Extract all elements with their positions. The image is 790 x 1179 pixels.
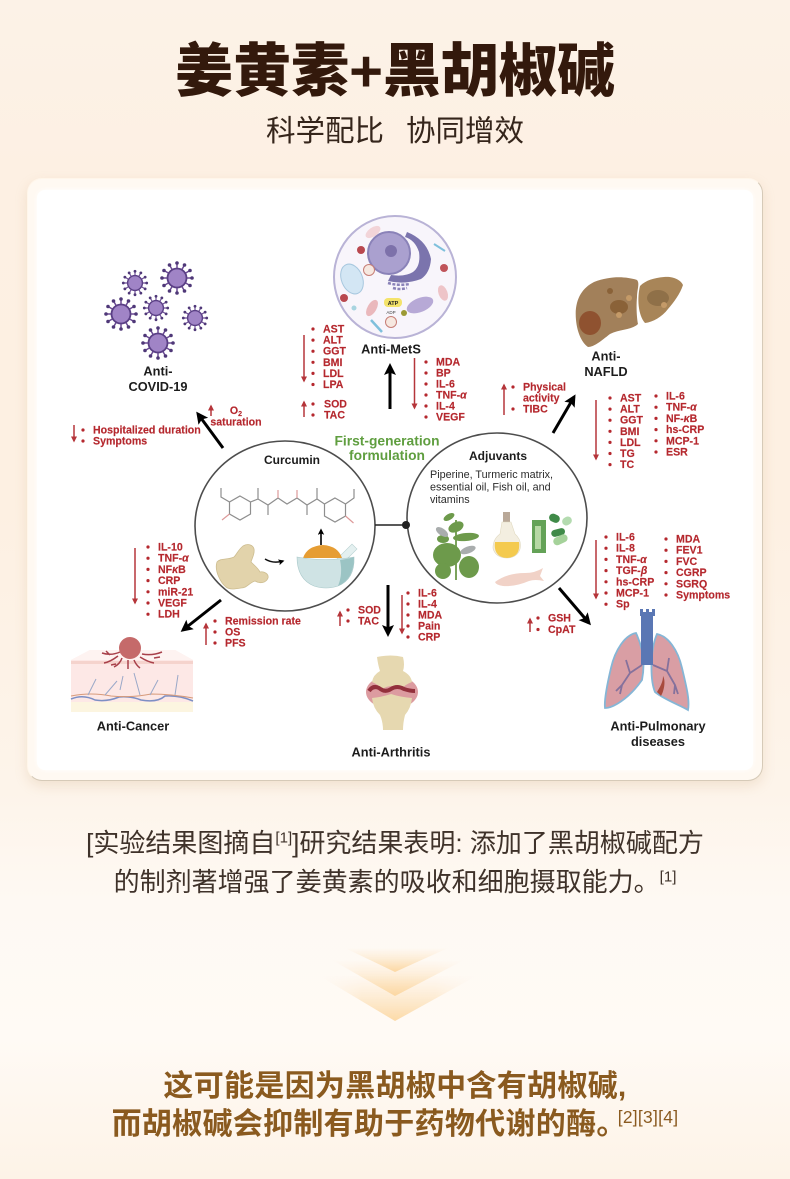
- list: MetS up: [304, 398, 347, 422]
- list: Pulmonary down left: [596, 532, 654, 611]
- label: Anti-Cancer: Anti-Cancer: [97, 718, 169, 734]
- list: MetS down left: [304, 324, 346, 391]
- arrow: to Pulmonary: [559, 588, 589, 623]
- list: Arthritis up: SOD: [358, 604, 381, 616]
- icon: cell: [334, 216, 456, 338]
- list: Pulmonary down left: TNF-α: [616, 554, 647, 566]
- heading: First-generation formulation: First-generation: [334, 434, 440, 448]
- icon: chevrons: [339, 951, 456, 1021]
- list: NAFLD down left: AST: [620, 392, 641, 404]
- icon: cell: ADP: [386, 310, 396, 315]
- list: Pulmonary down left: IL-6: [616, 532, 635, 544]
- label: Anti-NAFLD: Anti-: [591, 348, 621, 364]
- diagram: [70, 215, 730, 1021]
- list: Pulmonary down left: Sp: [616, 599, 630, 611]
- list: MetS down left: AST: [323, 324, 344, 336]
- list: NAFLD down right: IL-6: [666, 390, 685, 402]
- icon: virus cluster: [104, 261, 208, 360]
- list: Pulmonary down right: FEV1: [676, 545, 703, 557]
- list: NAFLD down right: [656, 390, 704, 458]
- list: Arthritis up: TAC: [358, 616, 379, 628]
- icon: green capsules: [532, 512, 573, 553]
- text: adjuvant description: essential oil, Fish oil, and: [430, 482, 551, 494]
- panel: Curcumin circle: [195, 441, 375, 611]
- arrow: to COVID: [198, 414, 223, 448]
- list: NAFLD down right: hs-CRP: [666, 424, 704, 436]
- list: MetS down right: IL-4: [436, 400, 455, 412]
- list: Pulmonary up: GSH: [548, 612, 571, 624]
- list: NAFLD up: activity: [523, 392, 560, 404]
- label: Anti-Pulmonary diseases: Anti-Pulmonary: [610, 718, 706, 734]
- list: MetS down right: VEGF: [436, 412, 465, 424]
- list: Pulmonary down right: MDA: [676, 534, 700, 546]
- list: Cancer down: IL-10: [158, 542, 183, 554]
- list: Pulmonary down left: IL-8: [616, 543, 635, 555]
- list: Cancer down: VEGF: [158, 598, 187, 610]
- list: NAFLD down left: GGT: [620, 415, 643, 427]
- list: Pulmonary down left: hs-CRP: [616, 576, 654, 588]
- label: Anti-COVID-19: COVID-19: [128, 379, 188, 394]
- list: Cancer down: [135, 542, 193, 621]
- list: COVID oxygen: 2: [238, 411, 242, 418]
- arrow: to NAFLD: [553, 397, 574, 433]
- molecule: [221, 488, 354, 523]
- list: NAFLD down left: TC: [620, 459, 634, 471]
- caption: [实验结果图摘自[1]]研究结果表明: 添加了黑胡椒碱配方: [86, 828, 704, 858]
- list: MetS down right: IL-6: [436, 378, 455, 390]
- label: Anti-MetS: Anti-MetS: [361, 342, 421, 356]
- list: MetS down left: LPA: [323, 379, 344, 391]
- list: NAFLD up: TIBC: [523, 404, 548, 416]
- list: Cancer down: TNF-α: [158, 553, 189, 565]
- heading: Adjuvants: Adjuvants: [469, 449, 527, 463]
- list: NAFLD down left: [596, 392, 643, 471]
- list: Pulmonary down left: MCP-1: [616, 588, 649, 600]
- list: COVID oxygen: [210, 405, 262, 428]
- list: NAFLD down left: ALT: [620, 404, 640, 416]
- conclusion: 而胡椒碱会抑制有助于药物代谢的酶。[2][3][4]: [112, 1107, 678, 1141]
- list: MetS down right: MDA: [436, 356, 460, 368]
- list: Pulmonary down right: CGRP: [676, 567, 707, 579]
- conclusion: [112, 1070, 678, 1141]
- list: MetS down left: GGT: [323, 346, 346, 358]
- list: COVID down: [74, 424, 201, 448]
- heading: Curcumin: Curcumin: [264, 453, 320, 467]
- icon: pepper plant: [433, 511, 479, 580]
- list: Cancer up: Remission rate: [225, 616, 301, 628]
- title: 姜黄素+黑胡椒碱: [175, 39, 615, 104]
- icon: oil bottle: [493, 512, 520, 558]
- arrow: up: [320, 530, 322, 545]
- list: Arthritis down: Pain: [418, 620, 440, 632]
- icon: ginger: [216, 545, 268, 589]
- list: COVID oxygen: O: [230, 405, 238, 417]
- text: adjuvant description: Piperine, Turmeric matrix,: [430, 469, 553, 481]
- arrow: to Cancer: [183, 600, 221, 630]
- list: NAFLD down right: NF-κB: [666, 413, 697, 425]
- list: COVID down: Hospitalized duration: [93, 424, 201, 436]
- label: Anti-Arthritis: Anti-Arthritis: [352, 744, 430, 760]
- text: adjuvant description: vitamins: [430, 494, 470, 506]
- list: Cancer up: [206, 616, 301, 650]
- list: NAFLD down right: ESR: [666, 446, 688, 458]
- icon: knee joint: [366, 656, 418, 730]
- icon: lungs: [605, 609, 689, 710]
- arrow: to MetS: [388, 366, 392, 409]
- list: NAFLD up: Physical: [523, 382, 566, 394]
- list: Arthritis down: [402, 588, 442, 644]
- list: NAFLD down right: TNF-α: [666, 402, 697, 414]
- label: Anti-COVID-19: Anti-: [143, 364, 173, 378]
- caption: [86, 828, 704, 897]
- list: NAFLD down left: LDL: [620, 437, 641, 449]
- panel: Adjuvants circle: [407, 433, 587, 603]
- list: MetS down right: TNF-α: [436, 390, 467, 402]
- list: Cancer down: CRP: [158, 575, 180, 587]
- list: MetS down right: BP: [436, 368, 451, 380]
- list: Pulmonary up: [530, 612, 576, 636]
- list: Cancer up: PFS: [225, 638, 246, 650]
- list: Pulmonary up: CpAT: [548, 624, 576, 636]
- list: Arthritis down: IL-4: [418, 598, 437, 610]
- label: Anti-NAFLD: NAFLD: [584, 364, 628, 379]
- list: MetS down left: ALT: [323, 335, 343, 347]
- arrow: to Arthritis: [386, 585, 390, 634]
- list: MetS down left: LDL: [323, 368, 344, 380]
- icon: mortar and powder: [297, 544, 357, 588]
- list: Cancer down: miR-21: [158, 586, 193, 598]
- list: Cancer up: OS: [225, 626, 240, 638]
- label: Anti-Pulmonary diseases: diseases: [631, 734, 685, 749]
- list: NAFLD down left: TG: [620, 448, 635, 460]
- list: Pulmonary down right: Symptoms: [676, 590, 730, 602]
- list: MetS down right: [414, 356, 467, 424]
- list: Pulmonary down right: SGRQ: [676, 578, 707, 590]
- heading: First-generation formulation: formulation: [349, 448, 425, 463]
- panel: diagram card: [27, 178, 763, 781]
- list: COVID down: Symptoms: [93, 436, 147, 448]
- list: Pulmonary down right: [666, 534, 730, 602]
- list: Pulmonary down right: FVC: [676, 556, 698, 568]
- icon: skin with tumor: [71, 637, 193, 712]
- icon: curved arrow: [265, 559, 283, 562]
- icon: cell: ATP: [388, 301, 399, 307]
- list: MetS up: SOD: [324, 398, 347, 410]
- icon: liver: [576, 277, 683, 347]
- list: Arthritis down: IL-6: [418, 588, 437, 600]
- list: MetS down left: BMI: [323, 357, 342, 369]
- list: NAFLD down left: BMI: [620, 426, 639, 438]
- conclusion: 这可能是因为黑胡椒中含有胡椒碱,: [163, 1070, 627, 1103]
- list: NAFLD up: [504, 382, 566, 416]
- list: Cancer down: LDH: [158, 609, 180, 621]
- subtitle: 科学配比 协同增效: [266, 115, 524, 148]
- list: MetS up: TAC: [324, 410, 345, 422]
- connector between circles: [375, 521, 410, 529]
- icon: fish: [495, 568, 544, 586]
- list: Arthritis down: MDA: [418, 610, 442, 622]
- list: NAFLD down right: MCP-1: [666, 435, 699, 447]
- list: Arthritis up: [340, 604, 381, 628]
- caption: 的制剂著增强了姜黄素的吸收和细胞摄取能力。[1]: [114, 867, 676, 897]
- list: Pulmonary down left: TGF-β: [616, 565, 647, 577]
- list: Arthritis down: CRP: [418, 632, 440, 644]
- list: Cancer down: NFκB: [158, 564, 186, 576]
- list: COVID oxygen: saturation: [210, 416, 262, 428]
